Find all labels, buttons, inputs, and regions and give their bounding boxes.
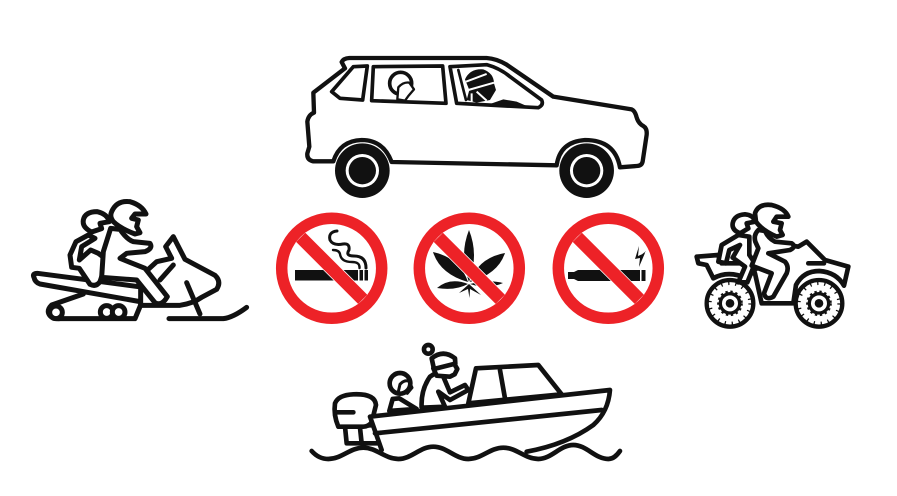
- cigarette and smoke: [295, 231, 368, 280]
- water waves: [312, 445, 620, 459]
- rear wheel: [707, 280, 753, 327]
- ski: [169, 307, 247, 319]
- sign: no vaping: [558, 218, 658, 318]
- rear quarter window: [332, 66, 367, 100]
- cannabis leaf: [433, 230, 505, 298]
- outboard motor: [335, 394, 380, 443]
- icon: motorboat with two people: [312, 345, 620, 459]
- seat and tunnel: [33, 273, 153, 304]
- sign: no cannabis: [419, 218, 519, 318]
- e-cigarette and spark: [568, 246, 646, 281]
- rear wheel: [335, 143, 390, 198]
- hull: [370, 390, 610, 452]
- driver: [102, 201, 167, 304]
- icon: car with driver and passenger: [307, 58, 647, 198]
- passenger: [70, 212, 109, 285]
- driver: [752, 205, 794, 298]
- snowmobile track: [48, 294, 141, 319]
- icon: ATV with two riders: [697, 205, 848, 327]
- adult with bobble hat: [422, 345, 468, 408]
- child: [389, 373, 417, 411]
- sign: no smoking: [282, 218, 382, 318]
- passenger: [718, 214, 755, 282]
- panel: prohibition signs: [282, 218, 658, 318]
- front wheel: [796, 280, 842, 327]
- icon: snowmobile with two riders: [33, 201, 247, 319]
- snowmobile cowl: [141, 237, 219, 305]
- middle window with passenger: [372, 66, 446, 103]
- car body: [307, 58, 647, 167]
- front window with driver: [450, 65, 542, 108]
- ATV body: [697, 242, 848, 303]
- cabin: [468, 365, 562, 403]
- front wheel: [559, 143, 614, 198]
